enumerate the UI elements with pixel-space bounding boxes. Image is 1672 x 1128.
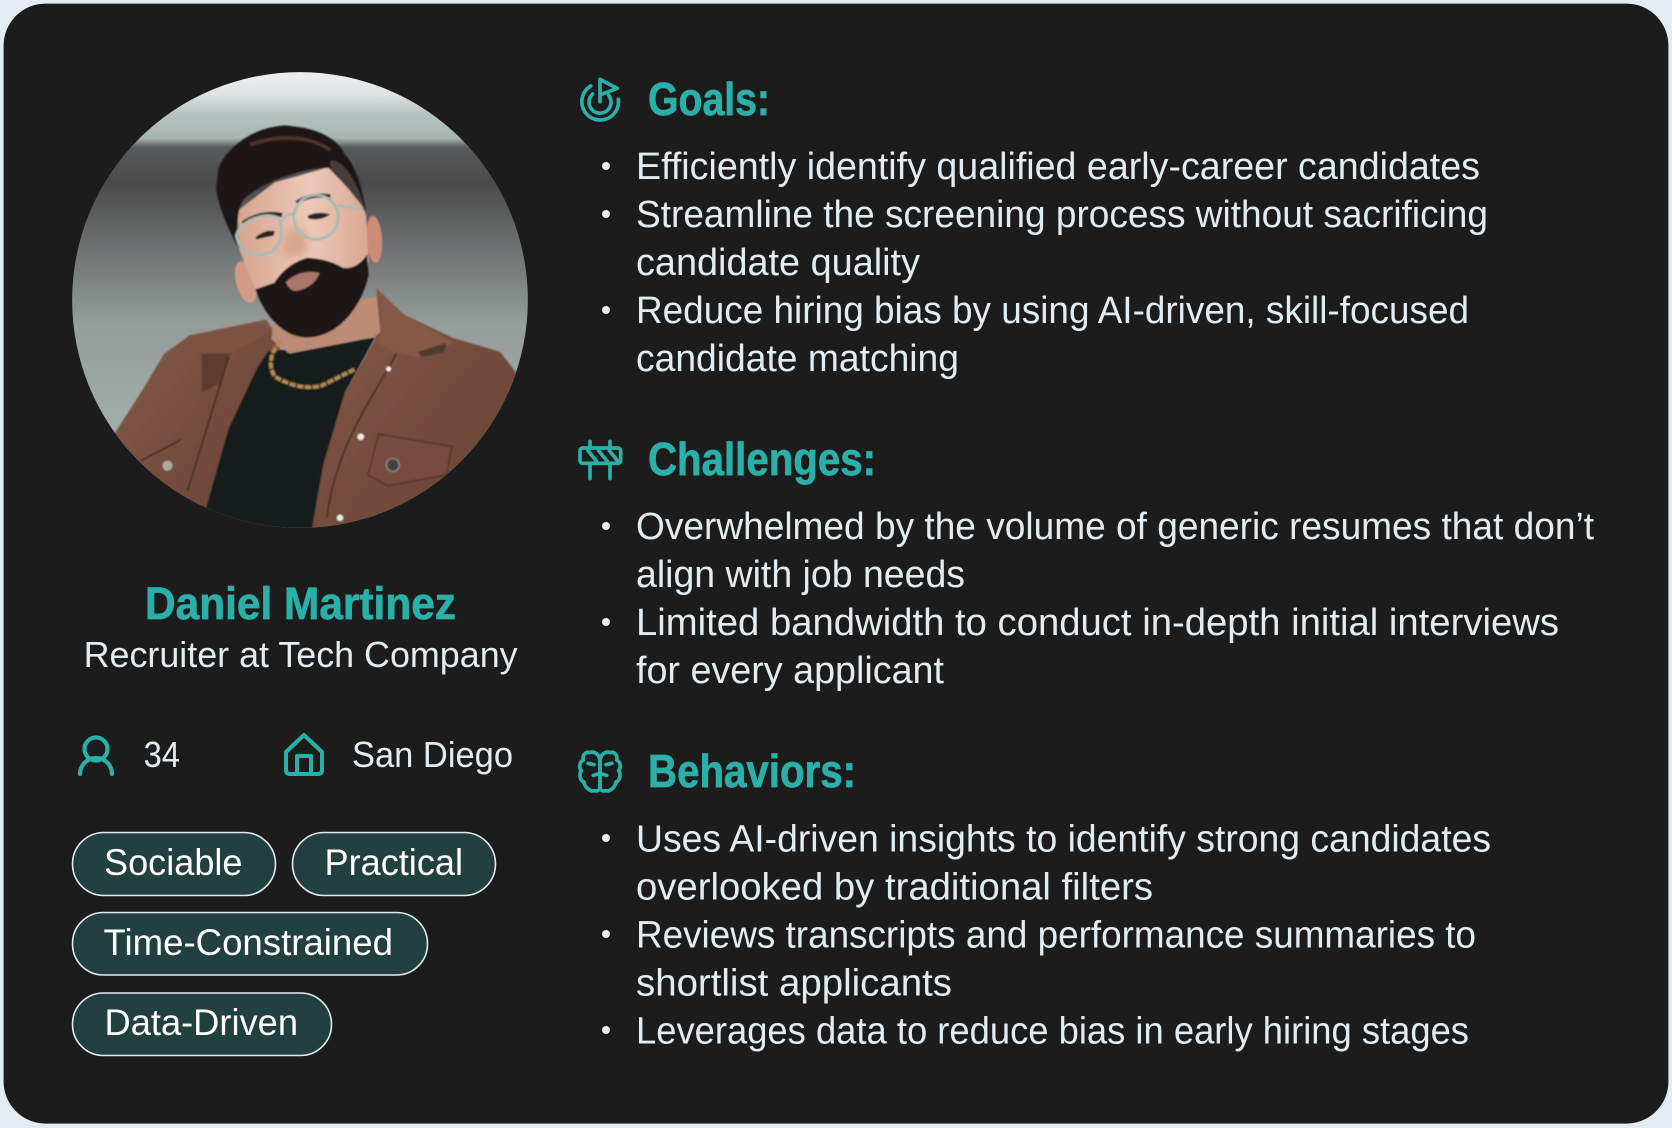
necklace — [271, 341, 355, 387]
icon: person — [80, 738, 112, 774]
tag: practical: Practical — [324, 842, 463, 883]
goals list: Reduce hiring bias by using AI-driven, skill-focused — [636, 290, 1469, 332]
challenges list: Overwhelmed by the volume of generic resumes that don’t — [636, 506, 1594, 548]
jacket buttons and snaps — [162, 366, 399, 521]
behaviors list: Uses AI-driven insights to identify strong candidates — [636, 818, 1491, 860]
icon: goals target flag — [582, 79, 618, 120]
jacket — [114, 289, 518, 536]
nose shadow — [280, 229, 309, 256]
heading: challenges: Challenges: — [648, 433, 876, 485]
behaviors list — [602, 818, 1491, 1052]
goals list: Streamline the screening process without sacrificing — [636, 194, 1488, 236]
shirt — [198, 337, 375, 536]
tag: sociable: Sociable — [104, 842, 242, 883]
tag: data-driven: Data-Driven — [104, 1002, 298, 1043]
tag: time-constrained: Time-Constrained — [104, 922, 393, 963]
tag: time-constrained — [72, 912, 428, 975]
goals list: Efficiently identify qualified early-career candidates — [636, 146, 1480, 188]
goals list: candidate quality — [636, 242, 920, 284]
trait tags — [72, 832, 496, 1056]
man portrait — [114, 126, 518, 536]
heading: behaviors: Behaviors: — [648, 745, 856, 797]
tag: practical — [292, 832, 496, 896]
challenges list: for every applicant — [636, 650, 944, 692]
goals list — [602, 146, 1488, 380]
challenges list: Limited bandwidth to conduct in-depth initial interviews — [636, 602, 1559, 644]
icon: behaviors brain — [580, 752, 620, 791]
eyes and brows — [243, 195, 330, 239]
behaviors list: Leverages data to reduce bias in early hiring stages — [636, 1010, 1469, 1052]
goals list: candidate matching — [636, 338, 959, 380]
role: Recruiter at Tech Company — [84, 634, 518, 675]
lips — [286, 272, 320, 291]
face — [236, 166, 370, 290]
age: 34 — [144, 734, 180, 775]
location: San Diego — [352, 734, 513, 775]
behaviors list: Reviews transcripts and performance summaries to — [636, 914, 1476, 956]
tag: sociable — [72, 832, 276, 896]
heading: goals: Goals: — [648, 73, 770, 125]
behaviors list: shortlist applicants — [636, 962, 952, 1004]
challenges list — [602, 506, 1594, 692]
beard — [255, 254, 369, 337]
name: Daniel Martinez — [145, 578, 456, 629]
neck — [271, 296, 380, 354]
behaviors list: overlooked by traditional filters — [636, 866, 1153, 908]
profile photo — [68, 71, 532, 536]
icon: house — [286, 735, 322, 774]
glasses — [236, 195, 362, 255]
ears — [231, 215, 384, 305]
tag: data-driven — [72, 993, 332, 1056]
hair — [216, 126, 366, 246]
challenges list: align with job needs — [636, 554, 965, 596]
icon: challenges barrier — [580, 441, 621, 479]
